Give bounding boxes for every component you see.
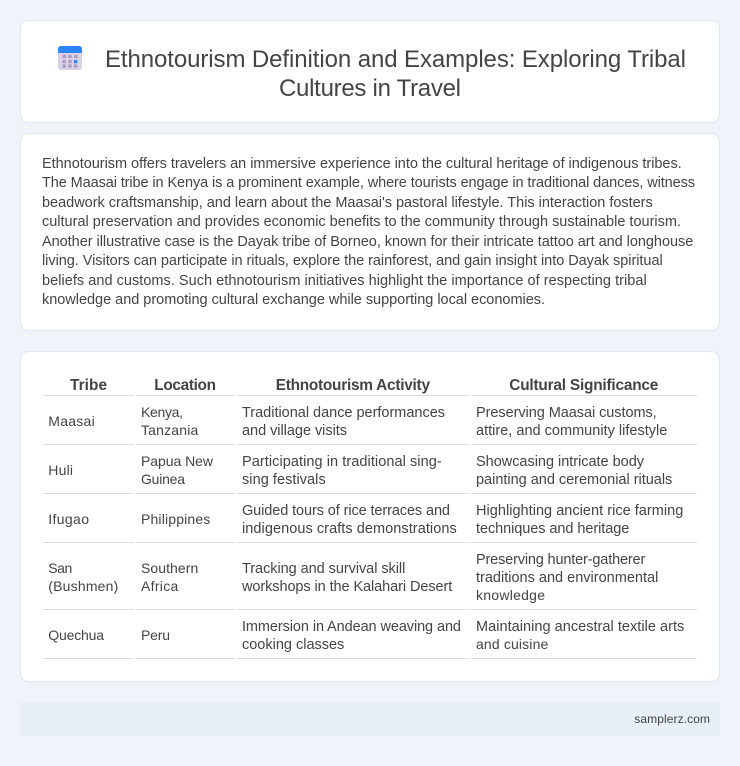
table row: Maasai: Kenya, [141,404,183,420]
table row: Huli: sing festivals [242,472,326,488]
icon: calendar [58,46,82,70]
table row: Ifugao: Ifugao [48,511,89,527]
table row: San (Bushmen): San [48,560,72,576]
table row: Quechua: and cuisine [476,636,549,652]
table row: Maasai: Tanzania [141,422,199,438]
title [105,46,686,102]
table row: Maasai: Preserving Maasai customs, [476,405,657,421]
table row: Ifugao [48,503,683,537]
table row: Maasai: Maasai [48,413,95,429]
table row: San (Bushmen): Southern [141,560,198,576]
table row: Maasai: attire, and community lifestyle [476,423,667,439]
table row: San (Bushmen) [48,552,658,603]
table row: Quechua [48,619,684,653]
table row: Quechua: cooking classes [242,637,344,653]
table row: Huli: Papua New [141,453,214,469]
panel: description [20,134,720,330]
text block: description paragraph: living. Visitors can participate in rituals, explore the rainforest, and gain insight into Dayak spiritual [42,253,663,269]
table row: San (Bushmen): traditions and environmental [476,570,658,586]
table row: San (Bushmen): (Bushmen) [48,578,118,594]
table header: Tribe [70,377,107,394]
table row: San (Bushmen): Africa [141,578,179,594]
table row: San (Bushmen): Preserving hunter-gatherer [476,552,645,568]
table row: San (Bushmen): knowledge [476,587,545,603]
footer [20,702,720,736]
title: Cultures in Travel [279,75,461,102]
text block: description paragraph: Ethnotourism offers travelers an immersive experience into the cultural heritage of indigenous tribes. [42,156,682,172]
table row: Huli: Huli [48,462,73,478]
table row: Quechua: Maintaining ancestral textile arts [476,619,684,635]
table row: Huli: painting and ceremonial rituals [476,472,672,488]
table row: Ifugao: techniques and heritage [476,521,629,537]
text block: description paragraph [42,156,695,308]
text block: description paragraph: Another illustrative case is the Dayak tribe of Borneo, known for their intricate tattoo art and longhouse [42,234,693,250]
table row: Huli [48,453,672,488]
text block: description paragraph: beliefs and customs. Such ethnotourism initiatives highlight the importance of respecting tribal [42,273,647,289]
table row: Ifugao: Highlighting ancient rice farming [476,503,683,519]
panel: title card [20,20,720,122]
footer: samplerz.com [634,712,710,726]
table row: Huli: Guinea [141,471,185,487]
text block: description paragraph: cultural preservation and provides economic benefits to the community through sustainable tourism. [42,214,681,230]
table row: Quechua: Peru [141,627,170,643]
table row: Ifugao: indigenous crafts demonstrations [242,521,457,537]
table row: San (Bushmen): Tracking and survival skill [242,561,405,577]
table header: Location [154,377,216,394]
table row: Maasai: and village visits [242,423,347,439]
table header: Ethnotourism Activity [276,377,430,394]
panel: table card [20,352,720,682]
table row: San (Bushmen): workshops in the Kalahari Desert [241,579,452,595]
table row: Huli: Showcasing intricate body [476,454,645,470]
text block: description paragraph: knowledge and promoting cultural exchange while supporting local economies. [42,292,545,308]
text block: description paragraph: The Maasai tribe in Kenya is a prominent example, where tourists engage in traditional dances, witness [42,175,695,191]
table row: Maasai [48,404,667,439]
table header [70,377,659,394]
table row: Ifugao: Philippines [141,511,210,527]
table row: Quechua: Quechua [48,627,104,643]
table header: Cultural Significance [509,377,659,394]
table row: Ifugao: Guided tours of rice terraces and [242,503,450,519]
table row: Huli: Participating in traditional sing- [242,454,442,470]
table row: Quechua: Immersion in Andean weaving and [242,619,461,635]
table row: Maasai: Traditional dance performances [242,405,445,421]
text block: description paragraph: beadwork craftsmanship, and learn about the Maasai's pastoral lifestyle. This interaction fosters [42,195,653,211]
title: Ethnotourism Definition and Examples: Exploring Tribal [105,46,686,73]
